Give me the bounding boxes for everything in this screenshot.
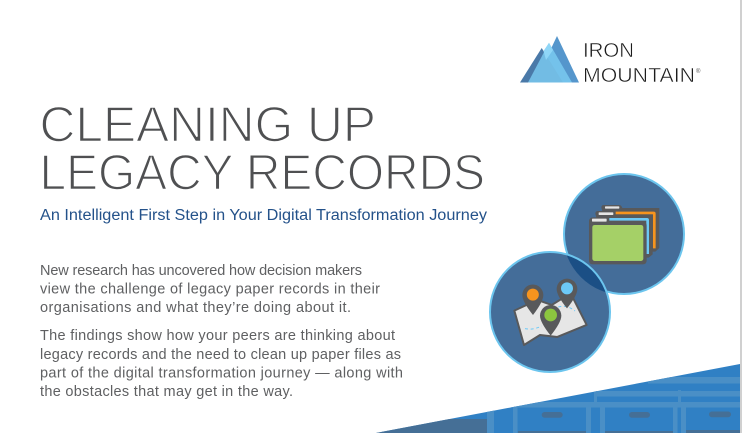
circle icon: map — [489, 251, 611, 373]
icon: map with pins — [514, 279, 587, 345]
icon: stacked folders — [589, 205, 659, 264]
intro paragraph: view the challenge of legacy paper records in their — [40, 282, 380, 298]
subtitle: An Intelligent First Step in Your Digital Transformation Journey — [40, 207, 487, 224]
icon: mountain peaks — [520, 36, 579, 82]
logo wordmark: MOUNTAIN — [583, 64, 695, 87]
page edge — [740, 0, 742, 433]
intro paragraph: organisations and what they’re doing about it. — [40, 300, 351, 316]
intro paragraph: New research has uncovered how decision makers — [40, 263, 362, 279]
title — [40, 96, 485, 200]
findings paragraph: the obstacles that may get in the way. — [40, 384, 293, 400]
circle icon: folders — [564, 174, 684, 294]
circle overlap — [567, 256, 606, 292]
logo wordmark — [583, 39, 701, 87]
findings paragraph: legacy records and the need to clean up paper files as — [40, 347, 401, 363]
logo wordmark: ® — [696, 68, 701, 75]
findings paragraph: part of the digital transformation journey — along with — [40, 366, 403, 382]
title: CLEANING UP — [40, 96, 376, 152]
title: LEGACY RECORDS — [40, 144, 485, 200]
findings paragraph — [40, 328, 403, 400]
footer band: filing cabinets — [376, 360, 740, 433]
logo wordmark: IRON — [583, 39, 634, 62]
findings paragraph: The findings show how your peers are thinking about — [40, 328, 395, 344]
logo: Iron Mountain — [520, 36, 701, 87]
intro paragraph — [40, 263, 380, 316]
